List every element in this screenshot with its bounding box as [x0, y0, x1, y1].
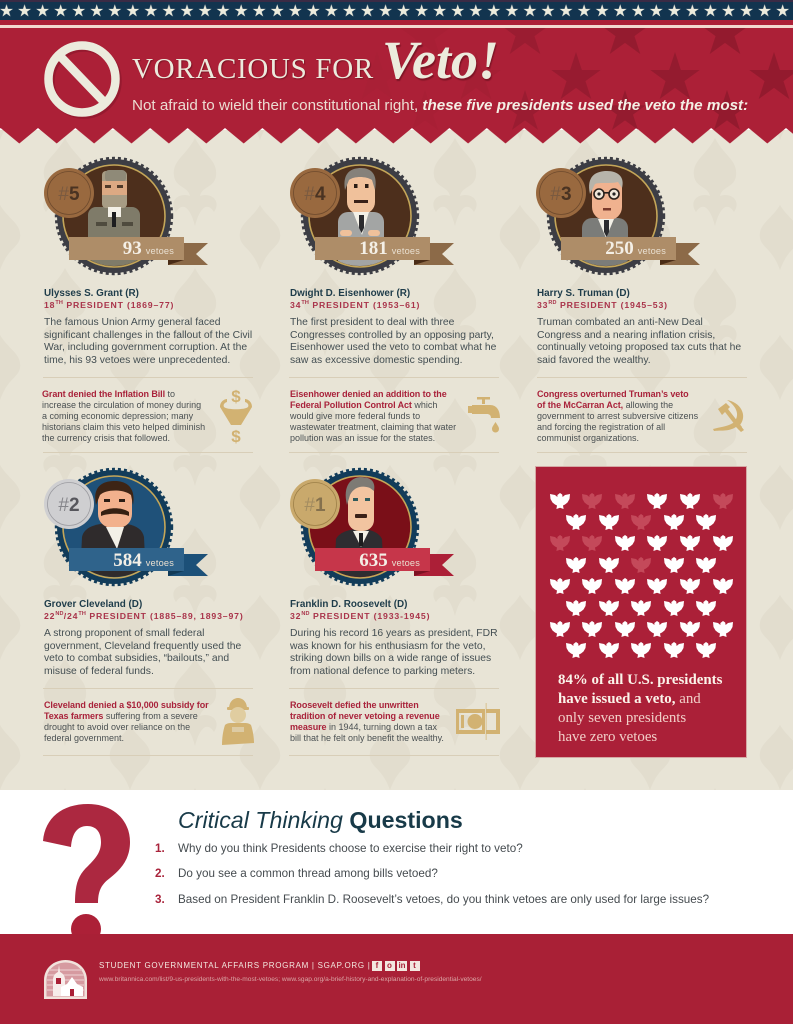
description: misuse of federal funds.	[44, 666, 154, 677]
icon: question mark	[43, 804, 130, 934]
question 3: Based on President Franklin D. Roosevelt’s vetoes, do you think vetoes are only used for large issues?	[178, 893, 709, 906]
background stars	[352, 7, 798, 130]
icon: faucet	[468, 397, 500, 432]
veto example: Federal Pollution Control Act which	[290, 400, 437, 410]
description: from national defence to parking meters.	[290, 666, 475, 677]
question 2: 2.	[155, 867, 165, 880]
logo	[44, 960, 87, 999]
description	[44, 628, 241, 677]
description: Eisenhower used the veto to combat what he	[290, 342, 496, 353]
veto example: would give more federal funds to	[290, 411, 420, 421]
term: 33RD PRESIDENT (1945–53)	[537, 300, 668, 310]
section heading: Critical Thinking Questions	[178, 807, 463, 833]
social icons: o	[387, 961, 392, 970]
portrait badge: Truman: #3	[550, 184, 572, 205]
social icons: t	[413, 961, 416, 970]
panel: Roosevelt	[289, 468, 500, 756]
term: 22ND/24TH PRESIDENT (1885–89, 1893–97)	[44, 611, 244, 621]
social icons: f	[376, 961, 378, 970]
veto example: Texas farmers suffering from a severe	[44, 711, 198, 721]
description	[44, 317, 252, 366]
title: VORACIOUS FOR	[132, 53, 374, 85]
veto example: Eisenhower denied an addition to the	[290, 389, 447, 399]
veto example: wastewater treatment, claiming that water	[290, 422, 456, 432]
panel: eagle statistic	[536, 467, 746, 757]
header banner	[0, 0, 793, 144]
veto example: bill that he felt only benefit the wealthy.	[290, 733, 444, 743]
veto example	[44, 700, 209, 743]
veto example: communist organizations.	[537, 433, 639, 443]
portrait badge: Grant	[44, 156, 208, 276]
name: Dwight D. Eisenhower (R)	[290, 288, 410, 299]
name: Franklin D. Roosevelt (D)	[290, 599, 407, 610]
veto example	[42, 389, 205, 443]
eagle pictogram	[550, 493, 733, 658]
portrait badge: Grant: #5	[58, 184, 80, 205]
description: significant challenges in the fallout of the Civil	[44, 330, 252, 341]
veto example: Congress overturned Truman’s veto	[537, 389, 689, 399]
name: Grover Cleveland (D)	[44, 599, 142, 610]
social icons: in	[398, 961, 406, 970]
description: The first president to deal with three	[290, 317, 454, 328]
veto example: government to arrest subversive citizens	[537, 411, 698, 421]
description: continually vetoing proposed tax cuts that he	[537, 342, 741, 353]
veto example: Roosevelt defied the unwritten	[290, 700, 419, 710]
veto example: the currency crisis that followed.	[42, 433, 170, 443]
description: time, his 93 vetoes were unprecedented.	[44, 355, 230, 366]
veto example: increase the circulation of money during	[42, 400, 201, 410]
icon: funnel with dollars	[220, 387, 252, 446]
statistic text: have issued a veto, and	[558, 691, 701, 707]
question 1: Why do you think Presidents choose to exercise their right to veto?	[178, 842, 523, 855]
description: Congresses controlled by an opposing party,	[290, 330, 494, 341]
footer	[0, 934, 793, 1024]
veto example: tradition of never vetoing a revenue	[290, 711, 440, 721]
panel: Eisenhower	[289, 156, 500, 453]
term: 34TH PRESIDENT (1953–61)	[290, 300, 420, 310]
question 2: Do you see a common thread among bills vetoed?	[178, 867, 438, 880]
veto example: a coming economic depression; many	[42, 411, 193, 421]
description: Truman combated an anti-New Deal	[537, 317, 703, 328]
veto example: and forcing the registration of all	[537, 422, 665, 432]
description: veto to combat subsidies, “bailouts,” and	[44, 653, 229, 664]
description	[290, 317, 496, 366]
veto example: historians claim this veto helped diminish	[42, 422, 205, 432]
question list	[155, 842, 709, 906]
icon: funnel with dollars: $	[231, 387, 241, 406]
portrait badge: Cleveland	[44, 468, 208, 586]
description	[290, 628, 498, 677]
portrait badge: Eisenhower: #4	[304, 184, 326, 205]
description: A strong proponent of small federal	[44, 628, 204, 639]
description	[537, 317, 741, 366]
icon: prohibition sign	[48, 46, 118, 114]
veto example: of the McCarran Act, allowing the	[537, 400, 673, 410]
veto example: federal government.	[44, 733, 124, 743]
term: 32ND PRESIDENT (1933-1945)	[290, 611, 430, 621]
vote count ribbon: 250 vetoes	[605, 238, 666, 259]
panel: Cleveland	[43, 468, 254, 756]
statistic text: only seven presidents	[558, 710, 686, 726]
icon: hammer and sickle	[713, 400, 744, 432]
organisation line: STUDENT GOVERNMENTAL AFFAIRS PROGRAM | SGAP.ORG |	[99, 961, 371, 970]
veto example: drought to avoid over reliance on the	[44, 722, 190, 732]
veto example: Cleveland denied a $10,000 subsidy for	[44, 700, 209, 710]
description: government, Cleveland frequently used the	[44, 641, 241, 652]
title script word: Veto!	[382, 30, 499, 90]
statistic text: 84% of all U.S. presidents	[558, 672, 722, 688]
sources: www.britannica.com/list/9-us-presidents-with-the-most-vetoes; www.sgap.org/a-brief-history-and-explanation-of-presidential-vetoes/	[99, 976, 482, 983]
icon: farmer	[222, 698, 254, 745]
name: Ulysses S. Grant (R)	[44, 288, 139, 299]
portrait badge: Roosevelt: #1	[304, 495, 326, 516]
statistic text: have zero vetoes	[558, 729, 657, 745]
description: was known for his enthusiasm for the veto,	[290, 641, 485, 652]
vote count ribbon: 635 vetoes	[359, 550, 420, 571]
portrait badge: Eisenhower	[290, 156, 454, 276]
portrait badge: Cleveland: #2	[58, 495, 80, 516]
description: The famous Union Army general faced	[44, 317, 221, 328]
icon: funnel with dollars: $	[231, 427, 241, 446]
description: During his record 16 years as president, FDR	[290, 628, 498, 639]
veto example: Grant denied the Inflation Bill to	[42, 389, 175, 399]
statistic text	[558, 672, 722, 745]
background: damask cream panel	[0, 130, 793, 790]
veto example	[290, 700, 444, 743]
veto example	[537, 389, 698, 443]
description: War, including government corruption. At the	[44, 342, 247, 353]
description: Congress and a nearing inflation crisis,	[537, 330, 715, 341]
question 3: 3.	[155, 893, 165, 906]
name: Harry S. Truman (D)	[537, 288, 630, 299]
social icons	[372, 961, 420, 971]
panel: Grant	[42, 156, 253, 453]
subtitle: Not afraid to wield their constitutional right, these five presidents used the veto the most:	[132, 97, 748, 114]
portrait badge: Truman	[536, 156, 700, 276]
veto example	[290, 389, 456, 443]
question 1: 1.	[155, 842, 165, 855]
veto example: measure in 1944, turning down a tax	[290, 722, 437, 732]
veto example: pollution was an issue for the states.	[290, 433, 435, 443]
vote count ribbon: 584 vetoes	[113, 550, 174, 571]
description: striking down bills on a wide range of issues	[290, 653, 491, 664]
term: 18TH PRESIDENT (1869–77)	[44, 300, 174, 310]
description: said favored the wealthy.	[537, 355, 651, 366]
vote count ribbon: 93 vetoes	[123, 238, 174, 259]
portrait badge: Roosevelt	[290, 468, 454, 586]
panel: Truman	[536, 156, 747, 453]
icon: dollar bill	[456, 703, 500, 740]
description: saw as excessive domestic spending.	[290, 355, 462, 366]
vote count ribbon: 181 vetoes	[359, 238, 420, 259]
